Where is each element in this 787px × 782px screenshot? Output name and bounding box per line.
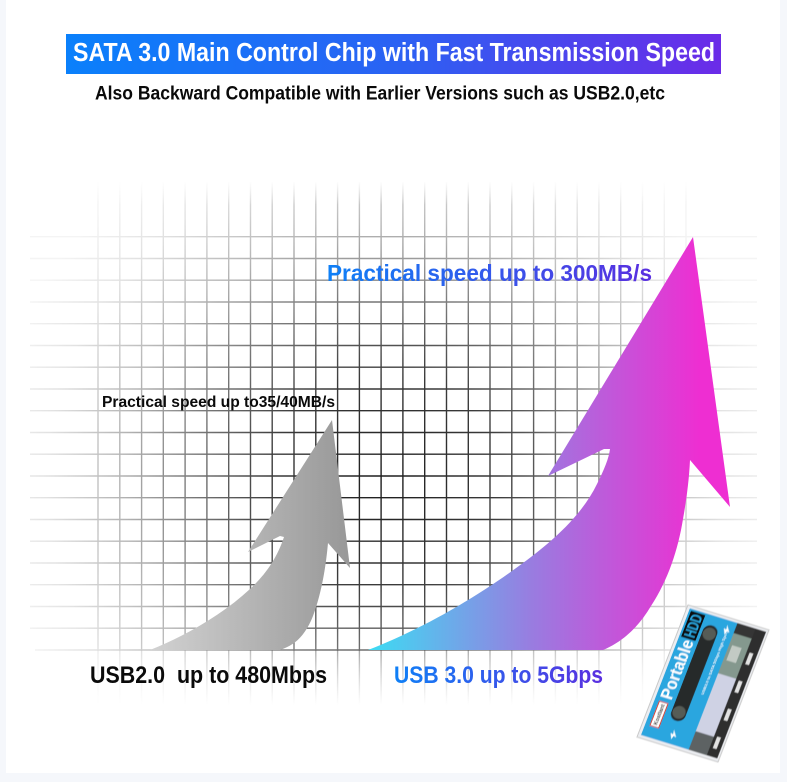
- title banner: [66, 34, 721, 74]
- label: USB 2.0 practical speed: Practical speed up to35/40MB/s: [102, 394, 335, 411]
- label: USB 3.0 rate: USB 3.0 up to 5Gbps: [394, 662, 603, 689]
- title banner: SATA 3.0 Main Control Chip with Fast Transmission Speed: [73, 39, 715, 67]
- icon: portable HDD enclosure: [637, 605, 769, 762]
- subtitle: Also Backward Compatible with Earlier Versions such as USB2.0,etc: [95, 84, 665, 104]
- icon: portable HDD enclosure: Portable: [656, 637, 698, 702]
- icon: portable HDD enclosure: USB3.0 to SATA 5Gbps High Speed: [701, 629, 730, 695]
- arrow: USB 3.0 speed: [368, 237, 730, 650]
- arrow: USB 2.0 speed: [150, 420, 350, 650]
- icon: portable HDD enclosure: Kostlant: [653, 704, 667, 726]
- background grid: [30, 181, 757, 714]
- icon: portable HDD enclosure: HDD: [682, 613, 707, 640]
- label: USB 3.0 practical speed: Practical speed up to 300MB/s: [327, 260, 652, 286]
- label: USB 2.0 rate: USB2.0 up to 480Mbps: [90, 662, 327, 689]
